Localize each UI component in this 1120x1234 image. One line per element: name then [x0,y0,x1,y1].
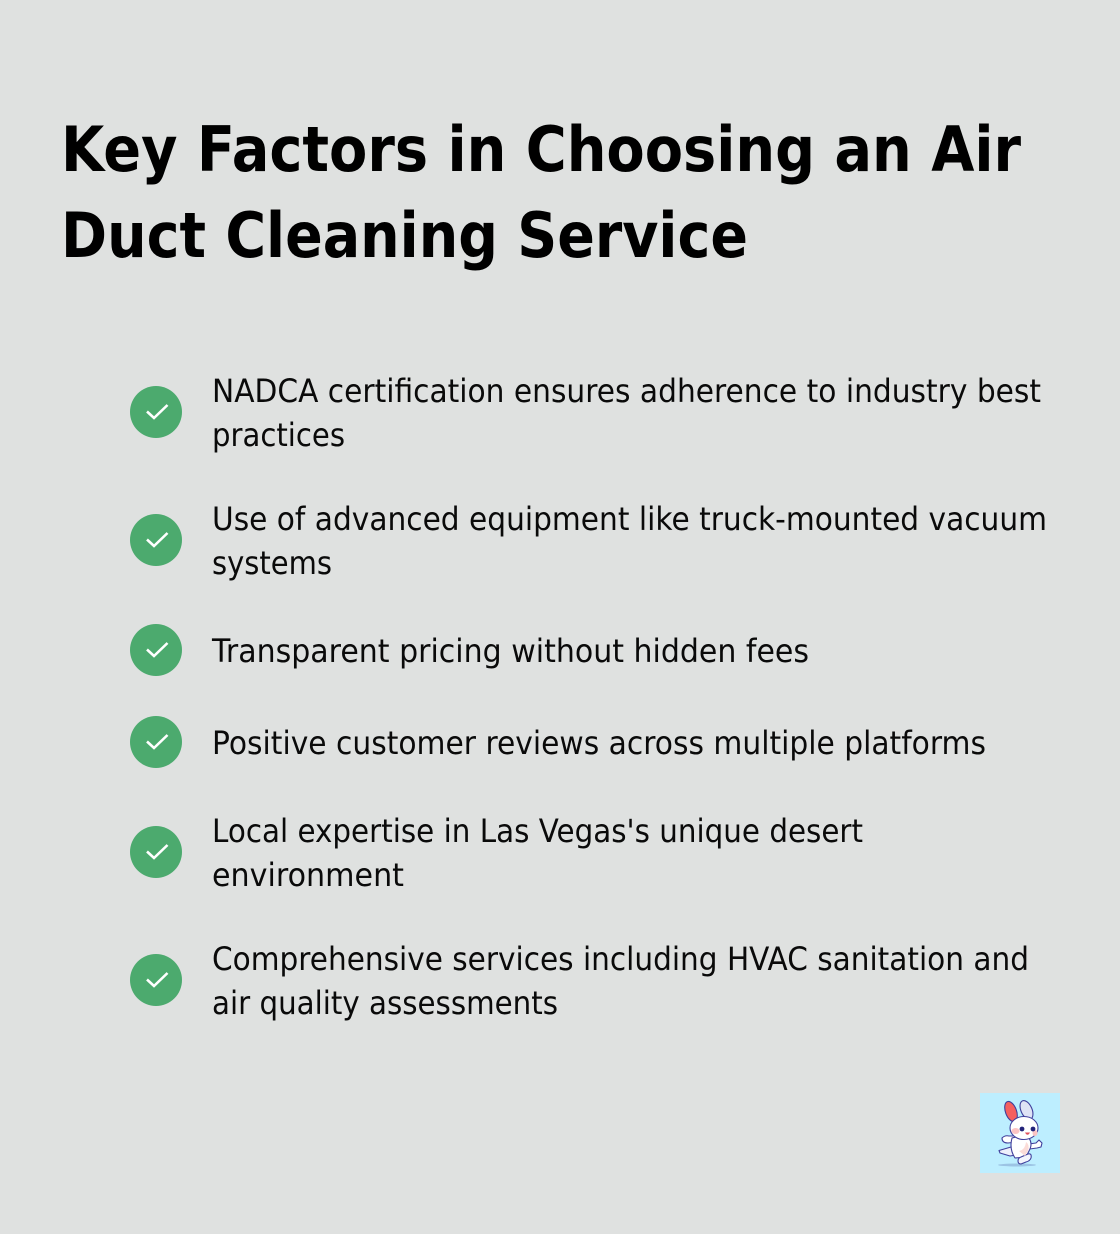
text: NADCA certification [212,372,1041,454]
text: local expertise: environment [212,856,404,894]
icon: check circle [130,954,182,1006]
list item: advanced equipment [130,500,1047,582]
text: NADCA certification: practices [212,416,345,454]
list item: NADCA certification [130,372,1041,454]
text: advanced equipment [212,500,1047,582]
text: local expertise [212,812,863,894]
icon: check circle [130,514,182,566]
text: local expertise: Local expertise in Las Vegas's unique desert [212,812,863,850]
icon: check circle [130,386,182,438]
text: comprehensive services: air quality assessments [212,984,558,1022]
list item: transparent pricing [130,624,809,676]
icon: check circle [130,624,182,676]
text: advanced equipment: Use of advanced equipment like truck-mounted vacuum [212,500,1047,538]
list item: comprehensive services [130,940,1029,1022]
text: customer reviews: Positive customer reviews across multiple platforms [212,724,986,762]
list item: customer reviews [130,716,986,768]
text: comprehensive services: Comprehensive services including HVAC sanitation and [212,940,1029,978]
text: advanced equipment: systems [212,544,332,582]
text: transparent pricing: Transparent pricing without hidden fees [211,632,809,670]
text: NADCA certification: NADCA certification ensures adherence to industry best [212,372,1041,410]
title [61,113,1021,272]
text: comprehensive services [212,940,1029,1022]
list item: local expertise [130,812,863,894]
icon: check circle [130,716,182,768]
icon: rabbit logo [980,1093,1060,1173]
title: Duct Cleaning Service [61,199,748,272]
icon: check circle [130,826,182,878]
title: Key Factors in Choosing an Air [61,113,1021,186]
